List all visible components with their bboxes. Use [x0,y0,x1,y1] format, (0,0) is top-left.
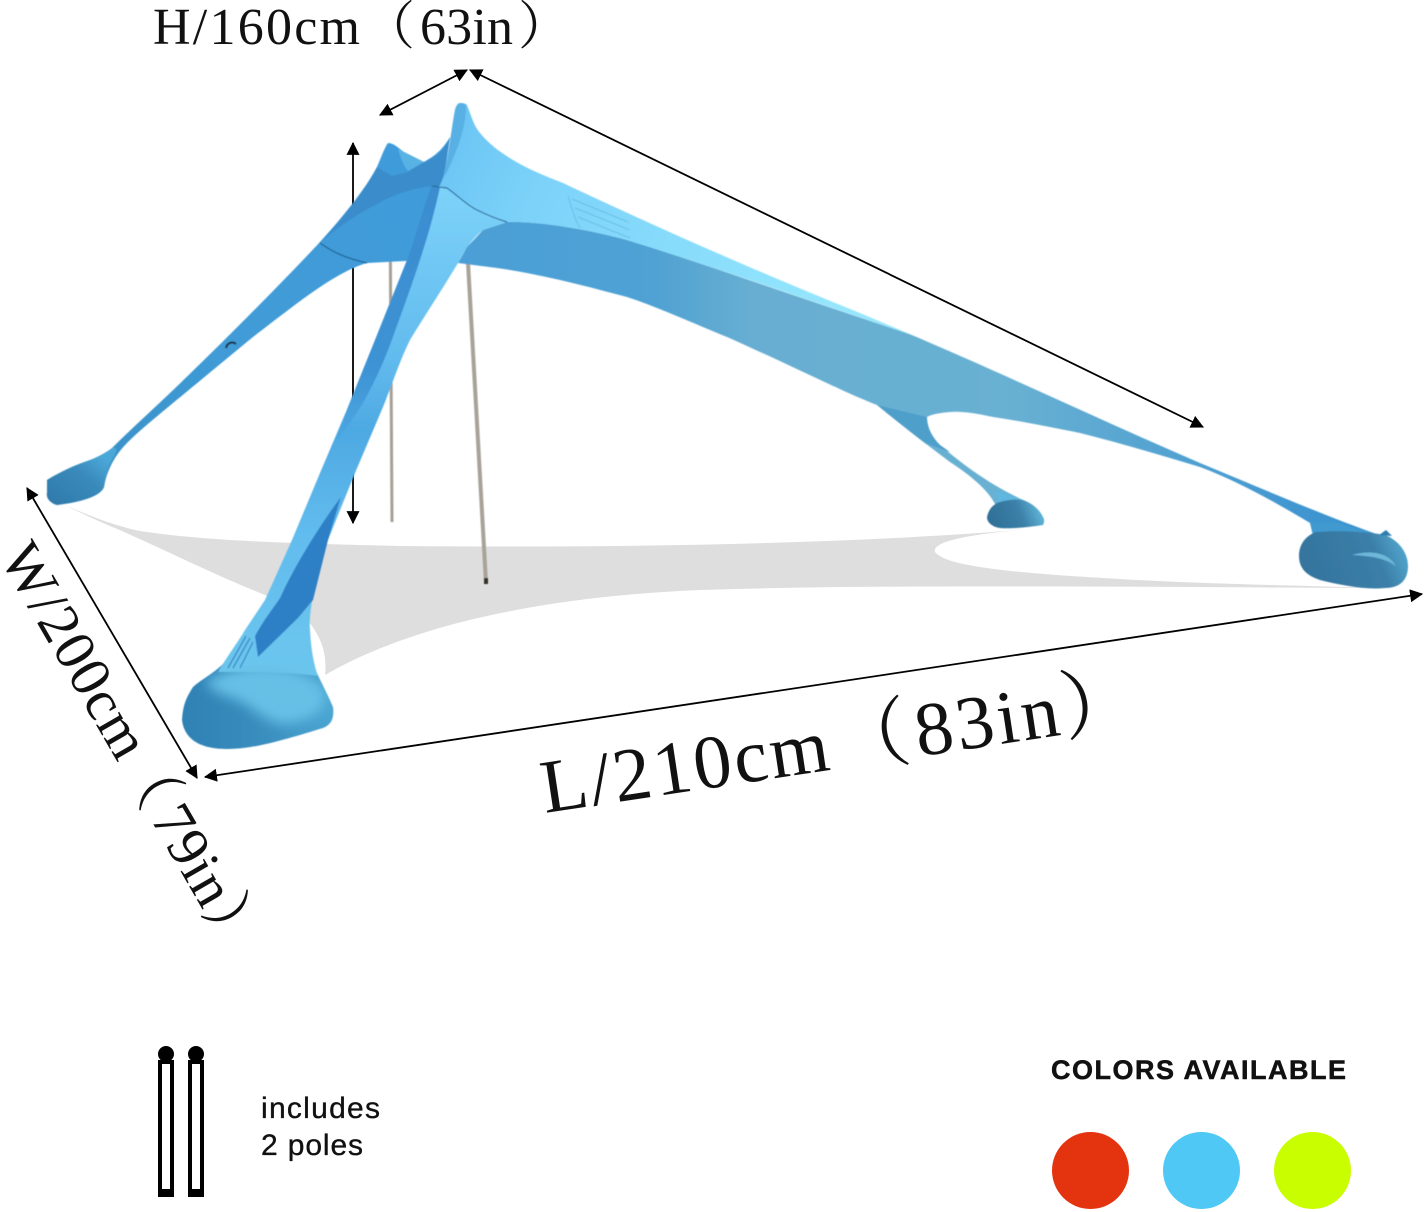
colors heading: COLORS AVAILABLE [1051,1055,1346,1085]
front bag [182,660,333,749]
ground shadow [65,505,1370,675]
width label: 79in [139,793,248,917]
light sliver at back peak [398,149,424,171]
length label: L/210cm [535,703,834,830]
canopy underside and right legs [458,222,1385,537]
front peak shading [443,103,466,178]
right bag highlight [1352,553,1396,566]
front pole base [484,578,488,584]
height label: ） [518,0,570,56]
poles caption: 2 poles [261,1129,363,1162]
width label: ） [192,884,277,967]
right bag tip [1379,530,1392,536]
arrow: width ground [27,488,197,778]
poles caption [261,1092,380,1162]
hook [226,343,236,348]
front leg [218,186,507,676]
arrow: height [352,143,354,523]
height label: H/160cm [153,0,360,56]
length label [535,657,1143,830]
front pole [467,245,486,583]
back panel dark hem [320,137,450,242]
icon: two poles [158,1046,204,1197]
arrow: length ground [205,594,1422,777]
height label: （ [363,0,415,56]
leg pleats [228,636,253,668]
height label [153,0,570,56]
top panel [440,103,912,335]
right bag neck [1310,522,1385,537]
width label [0,531,277,967]
length label: ） [1055,657,1143,751]
back right bag [987,500,1044,528]
arrow: length top [470,70,1203,427]
leg upper dark strip [335,187,440,442]
height label: 63in [420,0,513,56]
left bag [47,448,116,505]
arrow: width top [380,70,467,115]
back right bag neck [997,490,1023,504]
back seam [320,243,367,263]
length label: （ [828,691,915,786]
color swatches [1052,1132,1351,1209]
length label: 83in [909,669,1065,773]
poles caption: includes [261,1092,380,1125]
vent lines [568,196,630,238]
back left panel and leg [47,137,450,505]
right bag [1299,531,1408,588]
leg lower dark strip and slit [255,497,341,657]
tent [47,103,1408,749]
width label: （ [106,735,191,818]
back pole [390,200,392,522]
back right leg shade [877,405,950,452]
bag highlight [205,666,326,724]
front seam [432,186,507,222]
